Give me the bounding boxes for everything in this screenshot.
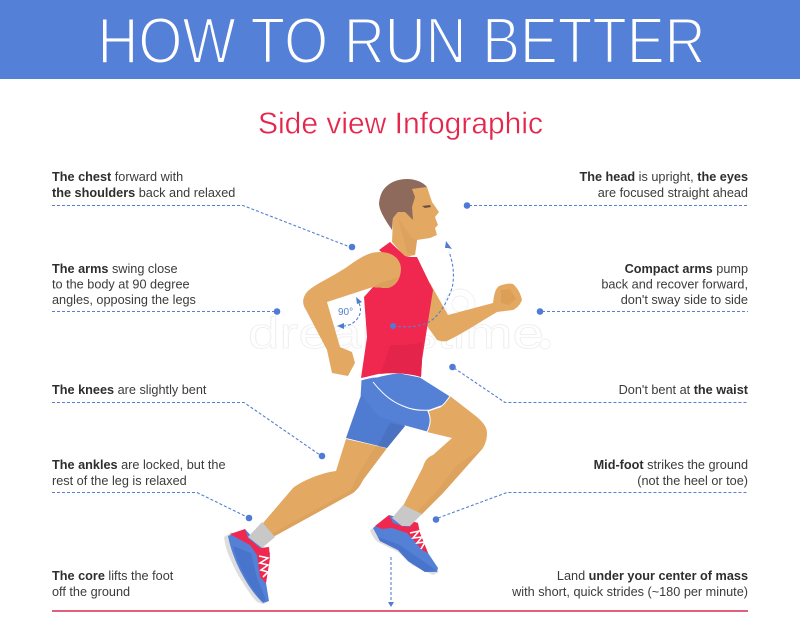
text: the chest: the shoulders [52,186,135,200]
shoe: rear foot [224,522,275,604]
text: mid-foot: (not the heel or toe) [637,474,748,488]
text: the arms: angles, opposing the legs [52,293,196,307]
text: the head: The head is upright, the eyes [579,170,748,184]
runner figure [224,179,522,604]
text: the ankles: The ankles are locked, but the [52,458,226,472]
front arm [425,283,522,341]
pointer: mid-foot [433,492,748,523]
pointer: ankles [52,492,252,521]
pointer: knees [52,402,325,459]
arrow: arm swing arc [390,241,453,329]
arrow: 90 degree angle [337,297,362,329]
neck and face [392,187,439,257]
text: the chest: The chest forward with [52,170,183,184]
watermark: dreamstime [248,309,544,358]
arrow: 90 degree angle: 90° [338,307,353,318]
text: the knees: The knees are slightly bent [52,383,207,397]
text: land: Land under your center of mass [557,569,748,583]
shoe: front foot [370,505,439,575]
pointer: compact arms [537,308,748,315]
ground line [52,610,748,612]
back leg [263,439,387,537]
text: the core: The core lifts the foot [52,569,173,583]
watermark [248,289,550,358]
rear arm [303,252,401,376]
text: compact arms: Compact arms pump [625,262,748,276]
shorts [346,373,450,448]
text: the head: are focused straight ahead [598,186,748,200]
text: compact arms: back and recover forward, [601,278,748,292]
hair [379,179,427,230]
text: mid-foot: Mid-foot strikes the ground [594,458,748,472]
pointer: waist [449,364,748,402]
text: the arms: The arms swing close [52,262,178,276]
pointer: head [464,202,748,209]
text: the chest: back and relaxed [139,186,235,200]
text: the ankles: rest of the leg is relaxed [52,474,187,488]
subtitle: Side view Infographic [258,106,543,140]
arrow: down to the ground [388,557,394,607]
text: land: with short, quick strides (~180 per minute) [511,585,748,599]
title banner: HOW TO RUN BETTER [98,4,706,77]
text: compact arms: don't sway side to side [621,293,748,307]
pointer: arms [52,308,280,315]
front leg [403,396,487,515]
text: the arms: to the body at 90 degree [52,278,190,292]
text: the core: off the ground [52,585,130,599]
text: the waist: Don't bent at the waist [619,383,749,397]
pointer: chest [52,206,355,250]
shirt [361,242,433,378]
